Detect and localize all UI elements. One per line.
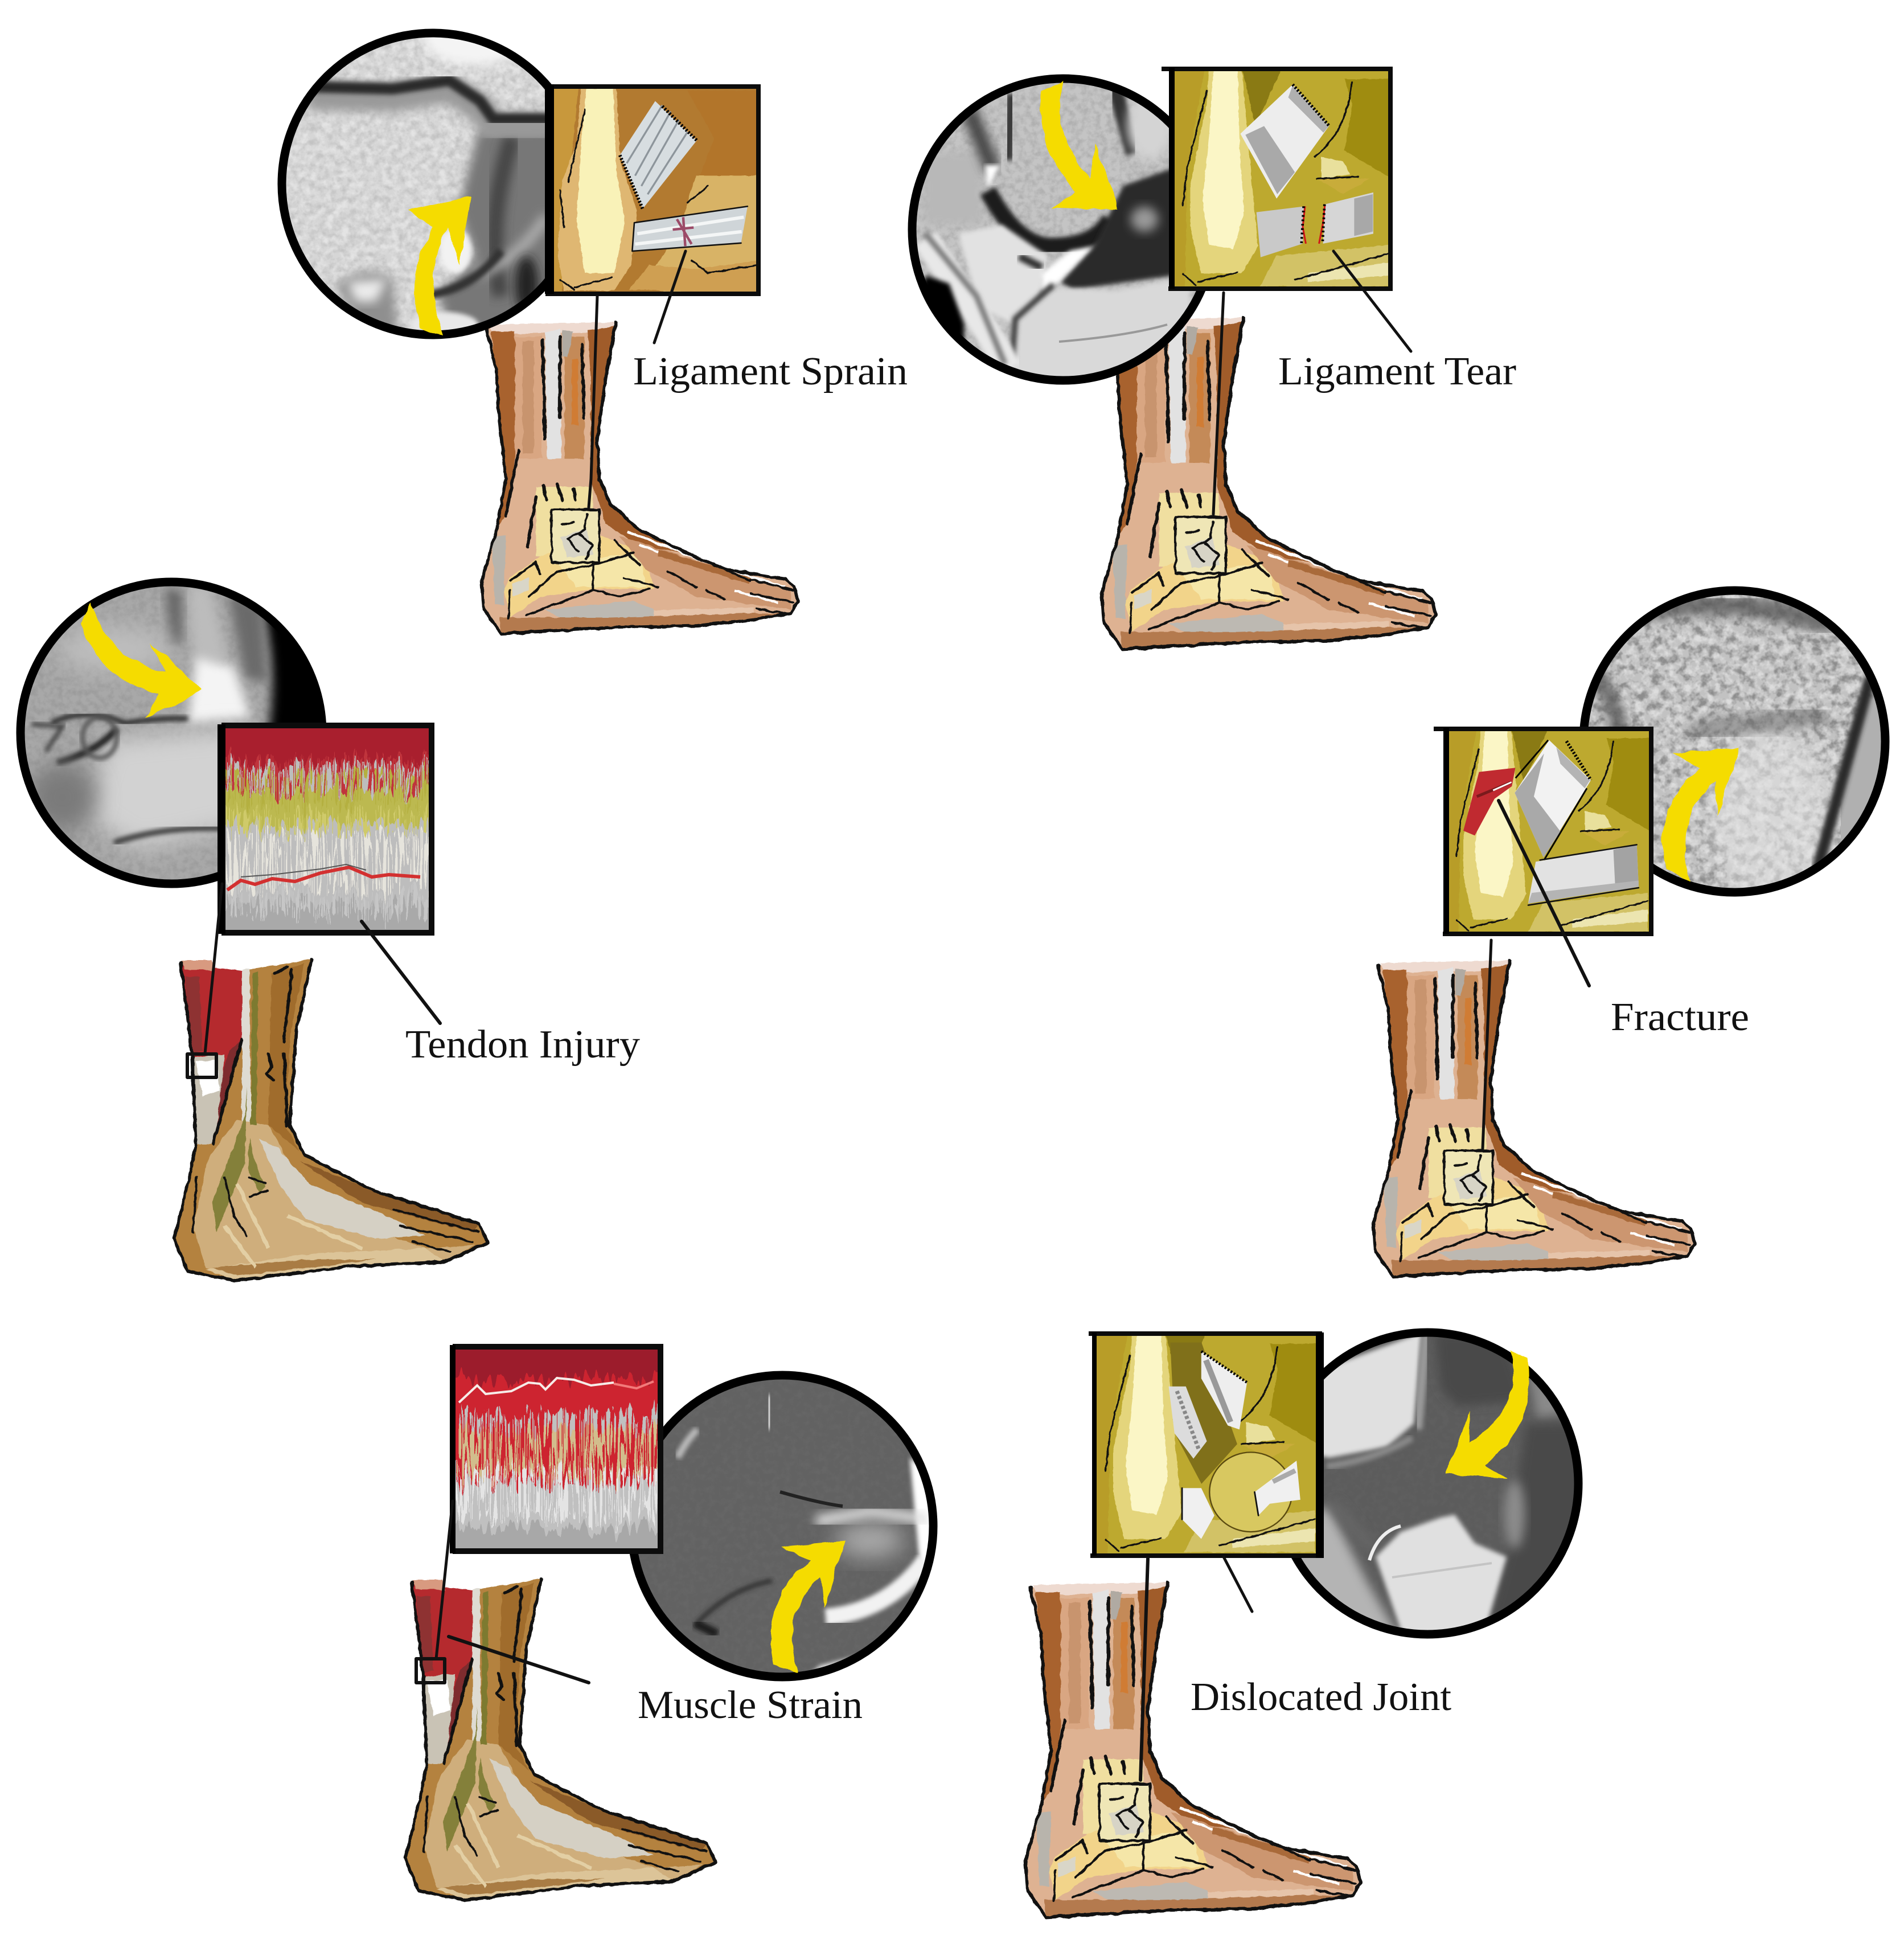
label: tendon injury: Tendon Injury bbox=[405, 1023, 640, 1067]
small marker box on tendon foot bbox=[187, 1054, 216, 1077]
leader line: tendon injury label bbox=[362, 921, 440, 1023]
panel: fracture bbox=[1373, 587, 1890, 1277]
arrow: yellow, tendon injury bbox=[81, 603, 203, 719]
foot illustration: ligament tear bbox=[1102, 318, 1435, 649]
torn ligament pieces bbox=[1257, 206, 1305, 257]
displaced talus lobe bbox=[1209, 1452, 1292, 1532]
label: ligament sprain: Ligament Sprain bbox=[633, 350, 908, 393]
leader line: box to foot bbox=[1140, 1559, 1148, 1780]
arrow: yellow, fracture bbox=[1662, 748, 1739, 881]
leader line: box to foot bbox=[1213, 293, 1224, 514]
label: ligament tear: Ligament Tear bbox=[1278, 350, 1516, 393]
dark channel bbox=[1170, 1343, 1237, 1484]
leader line: box to foot bbox=[205, 884, 222, 1053]
lower sprained ligament bbox=[632, 206, 748, 251]
inset box: tendon fibers bbox=[212, 705, 443, 956]
upper ligament bbox=[1515, 740, 1591, 858]
inset box: ligament tear anatomy bbox=[1162, 67, 1392, 289]
panel: ligament sprain bbox=[273, 14, 908, 634]
label: fracture: Fracture bbox=[1611, 995, 1749, 1039]
MRI scan: dislocated joint bbox=[1273, 1330, 1589, 1646]
leader line: box to foot bbox=[589, 296, 597, 507]
foot illustration: fracture bbox=[1373, 961, 1694, 1277]
panel: dislocated joint bbox=[1025, 1330, 1589, 1917]
upper ligament bbox=[1240, 84, 1329, 199]
arrow: yellow, ligament sprain bbox=[408, 196, 471, 335]
ligament fragments bbox=[1201, 1351, 1247, 1429]
inset box: fracture anatomy bbox=[1434, 728, 1651, 934]
MRI scan: ligament sprain bbox=[278, 28, 552, 339]
panel: muscle strain bbox=[405, 1326, 939, 1900]
leader line: box to foot bbox=[436, 1501, 453, 1659]
label: muscle strain: Muscle Strain bbox=[638, 1683, 863, 1727]
panel: ligament tear bbox=[905, 67, 1516, 649]
inset box: dislocated joint anatomy bbox=[1089, 1332, 1320, 1558]
leader line: box to foot bbox=[1483, 940, 1491, 1149]
label: dislocated joint: Dislocated Joint bbox=[1191, 1675, 1452, 1719]
lower ligament bbox=[1528, 844, 1639, 904]
MRI scan: muscle strain bbox=[626, 1369, 939, 1686]
leader line: fracture label bbox=[1499, 801, 1589, 986]
arrow: yellow, ligament tear bbox=[1040, 81, 1118, 210]
MRI scan: ligament tear bbox=[908, 74, 1206, 385]
panel: tendon injury bbox=[17, 578, 640, 1281]
foot illustration: ligament sprain bbox=[482, 322, 798, 634]
MRI scan: fracture bbox=[1577, 587, 1890, 900]
upper ligament bbox=[620, 101, 697, 209]
leader line: muscle strain label bbox=[449, 1637, 589, 1683]
leader line: dislocated joint label bbox=[1224, 1557, 1252, 1612]
inset box: muscle fibers bbox=[443, 1326, 672, 1576]
foot illustration: muscle strain bbox=[405, 1579, 716, 1900]
leader line: ligament tear label bbox=[1333, 251, 1411, 351]
inset box: ligament sprain anatomy bbox=[545, 84, 758, 294]
foot illustration: tendon injury bbox=[174, 960, 488, 1281]
arrow: yellow, muscle strain bbox=[770, 1541, 845, 1673]
arrow: yellow, dislocated joint bbox=[1445, 1351, 1529, 1478]
fracture: red break bbox=[1463, 768, 1515, 835]
foot illustration: dislocated joint bbox=[1025, 1582, 1360, 1917]
MRI scan: tendon injury bbox=[17, 578, 330, 888]
leader line: ligament sprain label bbox=[654, 251, 686, 343]
small marker box on foot bbox=[416, 1659, 445, 1683]
